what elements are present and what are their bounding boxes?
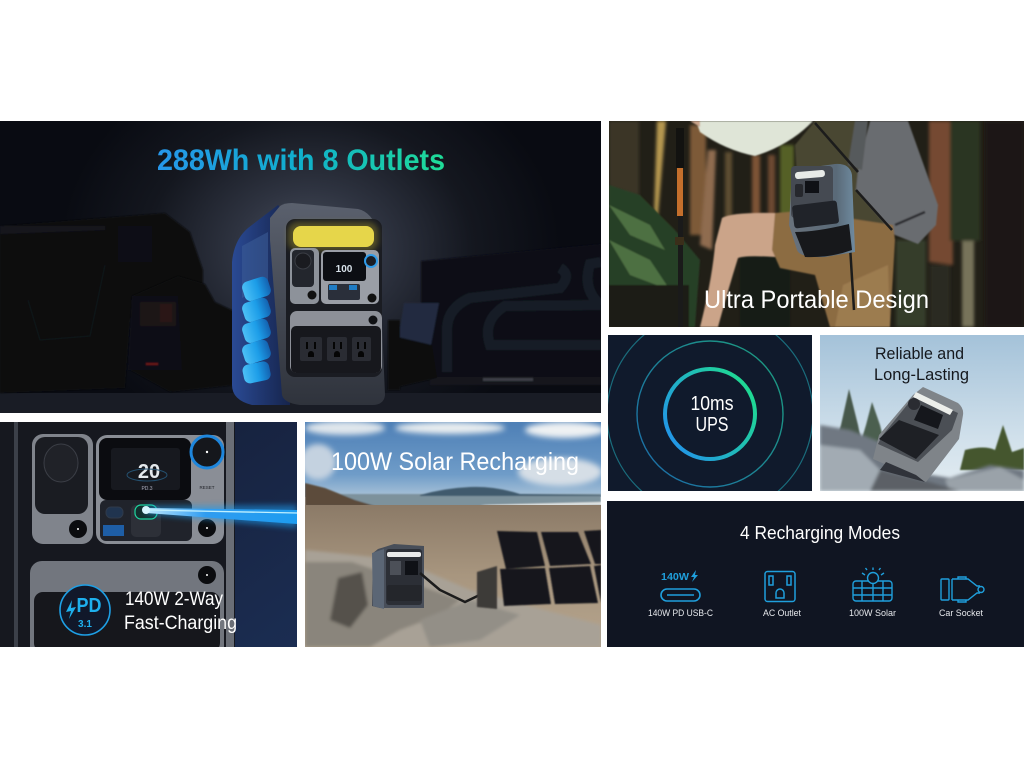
icon: AC socket bbox=[765, 572, 795, 602]
mode: 140W PD USB-C: 140W PD USB-C bbox=[648, 608, 713, 619]
display and port module bbox=[96, 435, 224, 544]
caption: Ultra Portable Design bbox=[704, 286, 929, 314]
display and port module: 20 bbox=[138, 461, 160, 483]
folding solar panel bbox=[477, 530, 601, 609]
background laptop and phone bbox=[388, 244, 601, 390]
blue charging beam bbox=[142, 505, 297, 528]
panel: ultra portable design bbox=[609, 121, 1024, 327]
label: 10ms bbox=[690, 393, 734, 415]
hiker body bbox=[690, 121, 938, 327]
140W label with bolt: 140W bbox=[661, 571, 689, 583]
forest background bbox=[609, 121, 1024, 327]
panel: reliable and long-lasting bbox=[820, 335, 1024, 491]
caption: Reliable and bbox=[875, 345, 964, 363]
mode: 100W solar: 100W Solar bbox=[849, 608, 896, 619]
caption: 140W 2-Way bbox=[125, 589, 223, 610]
display module bbox=[321, 250, 379, 304]
knob module bbox=[32, 434, 93, 544]
display and port module: RESET bbox=[199, 485, 215, 490]
ferns bbox=[609, 185, 790, 327]
panel: 288Wh with 8 outlets hero bbox=[0, 121, 601, 413]
background projector bbox=[128, 276, 236, 392]
rocks bbox=[820, 425, 1024, 491]
title: 288Wh with 8 Outlets bbox=[157, 144, 445, 177]
caption: Long-Lasting bbox=[874, 366, 969, 384]
distant island and sea bbox=[305, 483, 601, 507]
label bbox=[690, 393, 734, 436]
display and port module: PD.3 bbox=[141, 486, 153, 492]
power station on rock bbox=[372, 544, 424, 609]
mode: car socket bbox=[939, 577, 984, 619]
main housing bbox=[270, 203, 385, 405]
PD 3.1 badge bbox=[60, 585, 110, 635]
knob module bbox=[290, 248, 319, 304]
concentric rings bbox=[607, 311, 813, 517]
strap bbox=[815, 123, 892, 310]
panel: 10ms UPS bbox=[608, 335, 812, 491]
shorts bbox=[772, 211, 895, 327]
caption bbox=[124, 589, 237, 634]
mode: 100W solar bbox=[849, 568, 896, 619]
panel: 4 recharging modes bbox=[607, 501, 1024, 647]
PD 3.1 badge: 3.1 bbox=[78, 619, 92, 630]
label: UPS bbox=[696, 414, 728, 436]
mode: 140W PD USB-C bbox=[648, 570, 713, 619]
caption bbox=[874, 345, 969, 384]
icon: USB-C port bbox=[661, 589, 700, 601]
transparent side with battery cells bbox=[232, 205, 290, 405]
heading: 4 Recharging Modes bbox=[740, 523, 900, 543]
panel: 100W solar recharging bbox=[305, 422, 601, 647]
caption: 100W Solar Recharging bbox=[331, 448, 579, 476]
cable bbox=[420, 573, 490, 602]
icon: car charger bbox=[941, 577, 984, 602]
yellow light bar bbox=[288, 222, 378, 251]
mode: AC outlet bbox=[763, 572, 801, 619]
backpack bbox=[856, 121, 938, 244]
portable power station bbox=[789, 164, 855, 257]
beach sand bbox=[305, 505, 601, 647]
mode: AC outlet: AC Outlet bbox=[763, 608, 801, 619]
icon: solar panel with sun bbox=[853, 568, 892, 601]
trekking pole bbox=[675, 128, 684, 327]
AC outlet module bbox=[290, 311, 382, 373]
background cooler bbox=[0, 213, 203, 393]
shirt bbox=[696, 121, 813, 156]
panel: 140W 2-way fast-charging bbox=[0, 422, 297, 647]
leg bbox=[700, 213, 775, 327]
torso bbox=[795, 121, 890, 235]
lower outlet module bbox=[30, 561, 224, 661]
caption: Fast-Charging bbox=[124, 613, 237, 634]
tilted power station bbox=[873, 387, 963, 482]
foreground rocks bbox=[305, 550, 601, 647]
pine trees bbox=[835, 389, 1024, 470]
power station bbox=[232, 203, 385, 405]
display module: 100 bbox=[336, 264, 353, 275]
mode: car socket: Car Socket bbox=[939, 608, 983, 619]
PD 3.1 badge: PD bbox=[76, 595, 102, 617]
